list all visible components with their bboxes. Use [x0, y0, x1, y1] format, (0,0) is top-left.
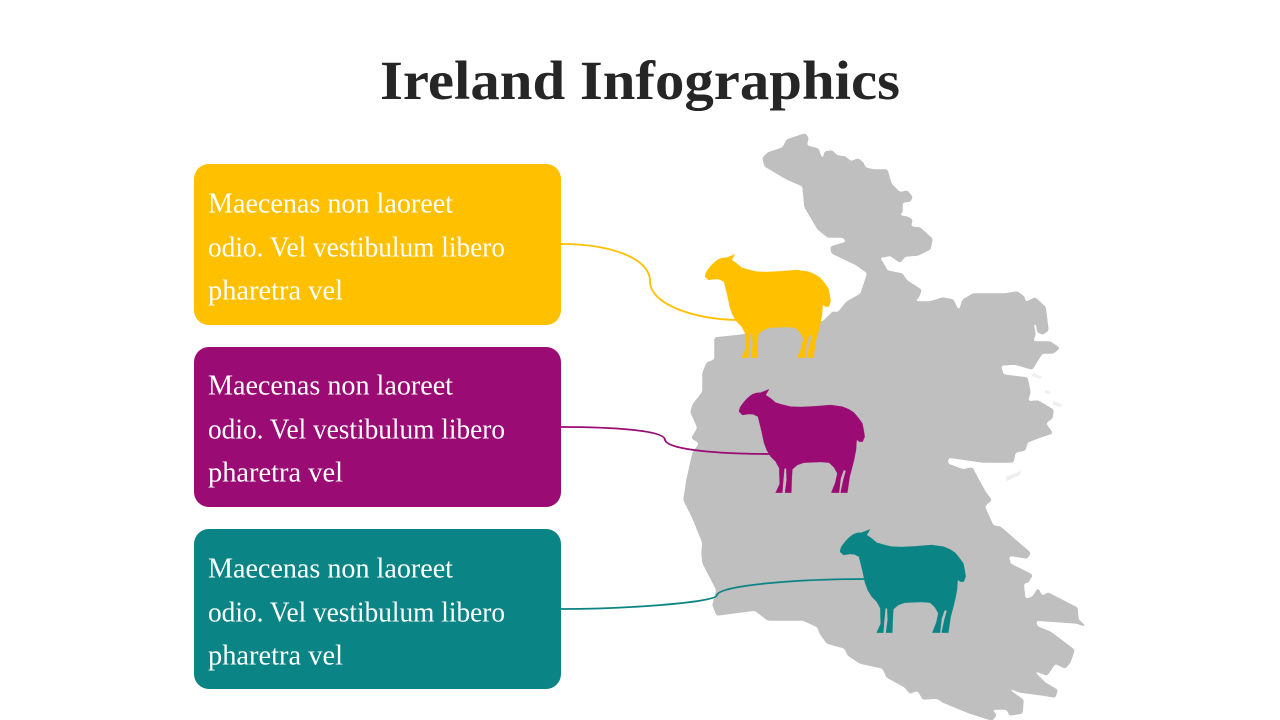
connector: teal	[561, 579, 866, 609]
panel: teal text box: pharetra vel	[208, 640, 343, 672]
panel: yellow text box: odio. Vel vestibulum libero	[208, 232, 505, 264]
connector: purple	[561, 427, 771, 454]
icon: purple sheep	[739, 389, 865, 493]
icon: yellow sheep	[705, 254, 831, 358]
panel: yellow text box: Maecenas non laoreet	[208, 188, 453, 220]
panel: teal text box	[194, 529, 561, 689]
connector: yellow	[561, 244, 737, 320]
panel: purple text box: odio. Vel vestibulum libero	[208, 414, 505, 446]
panel: yellow text box	[194, 164, 561, 325]
panel: teal text box: Maecenas non laoreet	[208, 552, 453, 584]
icon: teal sheep	[840, 529, 966, 633]
panel: purple text box	[194, 347, 561, 507]
panel: purple text box: pharetra vel	[208, 456, 343, 488]
panel: teal text box: odio. Vel vestibulum libero	[208, 596, 505, 628]
map of Ireland	[684, 134, 1085, 720]
title: Ireland Infographics	[380, 50, 900, 111]
panel: purple text box: Maecenas non laoreet	[208, 370, 453, 402]
panel: yellow text box: pharetra vel	[208, 274, 343, 306]
